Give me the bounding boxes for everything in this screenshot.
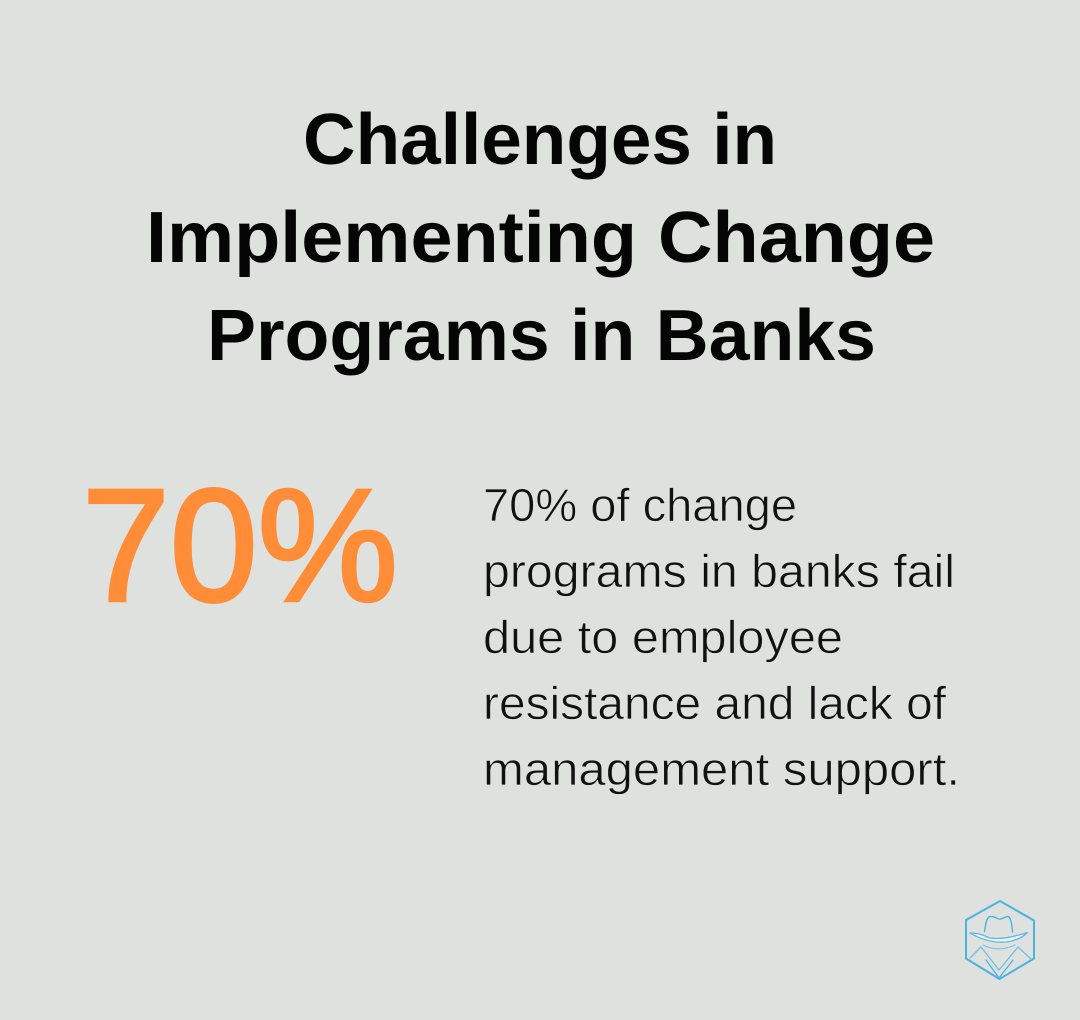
- description text block: programs in banks fail: [483, 545, 955, 597]
- description text block: due to employee: [483, 611, 843, 663]
- coat collar: [970, 947, 1031, 970]
- title: Challenges in: [303, 100, 777, 180]
- description text block: 70% of change: [483, 479, 797, 531]
- coat lower lapels: [986, 960, 1013, 978]
- description text block: resistance and lack of: [483, 677, 946, 729]
- description text block: management support.: [483, 743, 960, 795]
- title: Implementing Change: [146, 198, 935, 278]
- icon: hexagon logo with hat and coat: [966, 901, 1034, 979]
- description text block: [483, 479, 960, 795]
- hexagon outline: [966, 901, 1034, 979]
- title: [146, 100, 935, 376]
- hat shadow curve: [983, 945, 1015, 949]
- title: Programs in Banks: [207, 296, 876, 376]
- hat crown: [984, 916, 1012, 932]
- big statistic: 70%: 70%: [82, 456, 398, 634]
- hat brim: [970, 932, 1028, 942]
